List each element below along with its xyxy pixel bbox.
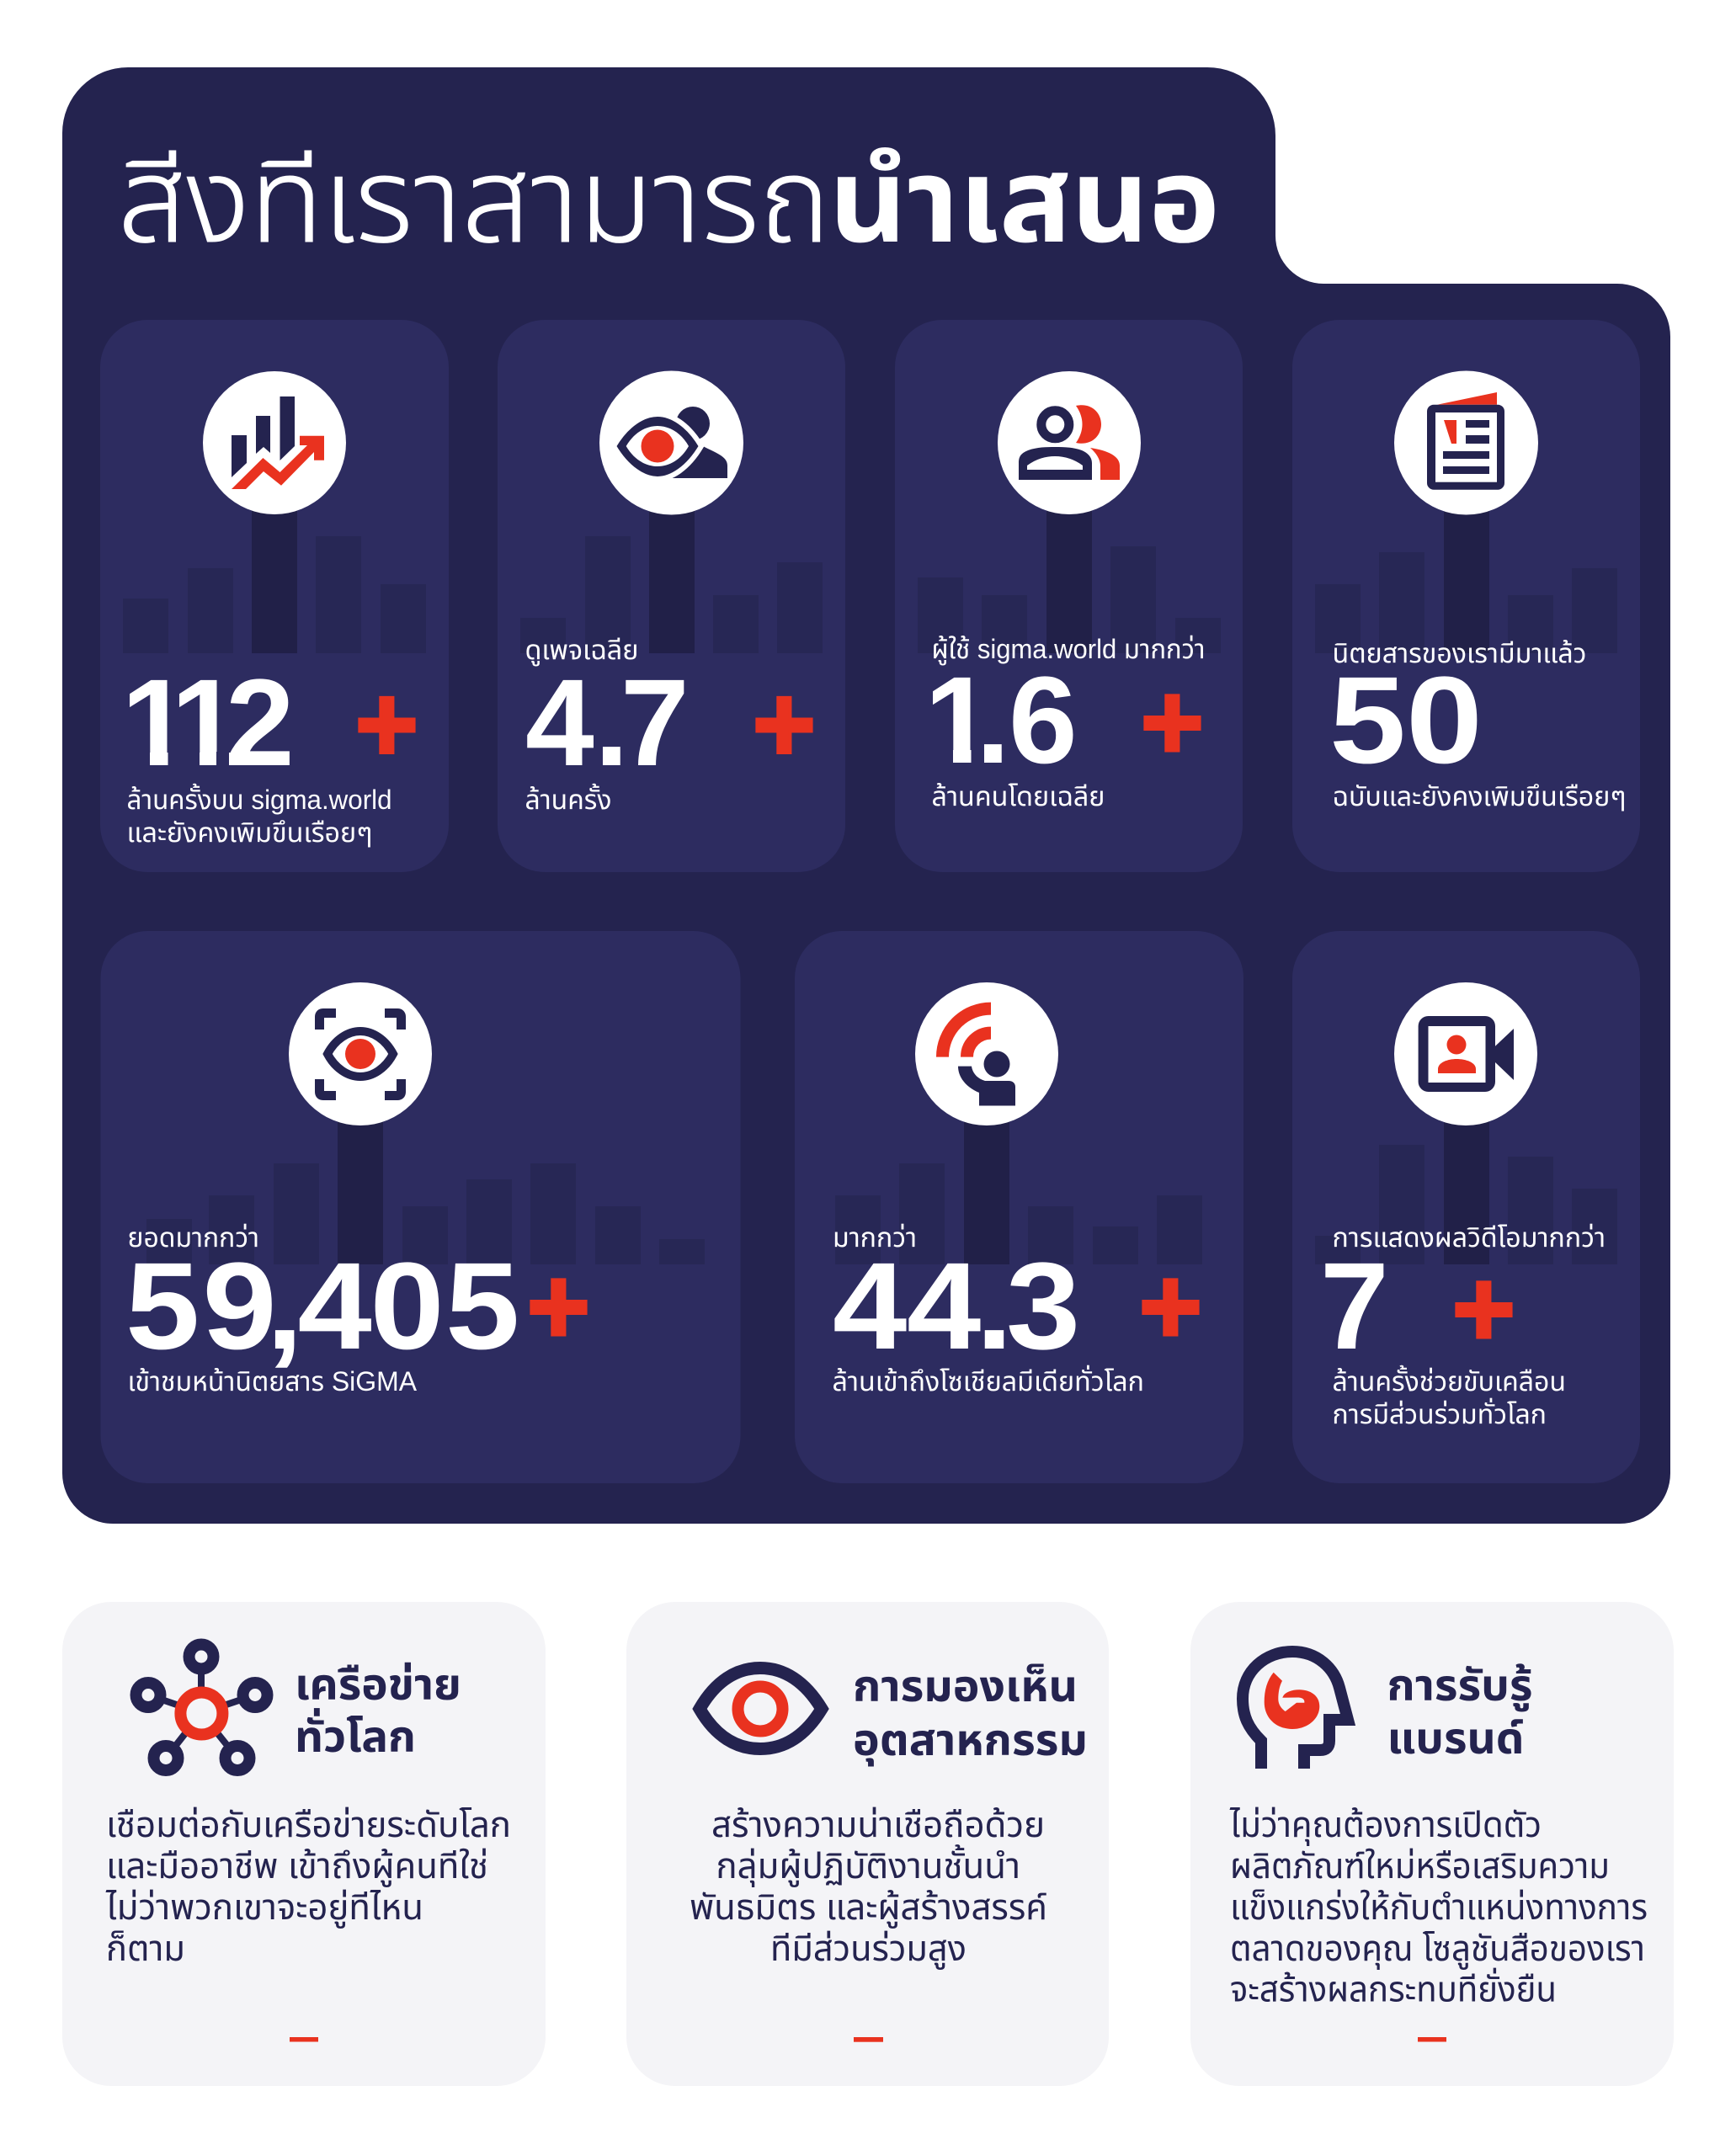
- label: ดูเพจเฉลีย: [525, 635, 638, 667]
- number: 1.6: [924, 652, 1078, 790]
- bar chart: [123, 505, 426, 653]
- icon: network: [136, 1645, 268, 1770]
- caption: [126, 783, 392, 848]
- caption: และยังคงเพิมขึนเรือยๆ: [126, 817, 372, 848]
- card: 112 million: [100, 320, 449, 872]
- body text: ไม่ว่าคุณต้องการเปิดตัว: [1229, 1805, 1542, 1846]
- heading: ทั่วโลก: [295, 1708, 416, 1762]
- number: 44.3: [833, 1237, 1080, 1375]
- card: 50 issues: [1292, 320, 1640, 872]
- card background: [100, 320, 449, 872]
- red dash: [1418, 2037, 1446, 2042]
- heading: [1387, 1662, 1532, 1764]
- number: 59,405: [125, 1237, 519, 1375]
- panel: dark stats background: [62, 67, 1670, 1524]
- bar chart: [1315, 505, 1617, 653]
- plus sign: +: [355, 664, 418, 785]
- title: [118, 135, 1220, 267]
- caption: ล้านเข้าถึงโซเชียลมีเดียทั่วโลก: [832, 1365, 1144, 1397]
- panel: global network: [62, 1602, 546, 2086]
- icon: magazine: [1394, 370, 1538, 515]
- bar chart: [835, 1111, 1202, 1264]
- card background: [626, 1602, 1109, 2086]
- body text: ผลิตภัณฑ์ใหม่หรือเสริมความ: [1230, 1846, 1610, 1886]
- plus sign: +: [1139, 1246, 1202, 1367]
- body text: จะสร้างผลกระทบทียั่งยืน: [1230, 1967, 1557, 2009]
- bar chart: [146, 1111, 705, 1264]
- caption: เข้าชมหน้านิตยสาร SiGMA: [128, 1366, 418, 1397]
- number: 7: [1320, 1237, 1389, 1375]
- icon: growth chart: [203, 371, 346, 514]
- card background: [498, 320, 845, 872]
- caption: ล้านครั้งช่วยขับเคลือน: [1332, 1365, 1566, 1397]
- panel: industry visibility: [626, 1602, 1109, 2086]
- card: 44.3 million reach: [795, 931, 1243, 1483]
- label: ยอดมากกว่า: [128, 1222, 259, 1253]
- red dash: [290, 2037, 318, 2042]
- label: นิตยสารของเรามีมาแล้ว: [1332, 638, 1586, 668]
- plus sign: +: [527, 1246, 590, 1367]
- label: มากกว่า: [833, 1222, 917, 1253]
- heading: [295, 1661, 461, 1762]
- card: 59,405 views: [101, 931, 741, 1483]
- caption: ล้านครั้งบน sigma.world: [126, 783, 392, 815]
- card background: [1292, 320, 1640, 872]
- body text: [105, 1805, 511, 1968]
- heading: แบรนด์: [1387, 1715, 1524, 1764]
- number: 50: [1329, 652, 1483, 790]
- red dash: [854, 2037, 883, 2042]
- body text: พันธมิตร และผู้สร้างสรรค์: [690, 1887, 1047, 1929]
- label: การแสดงผลวิดีโอมากกว่า: [1332, 1222, 1606, 1253]
- card background: [795, 931, 1243, 1483]
- card: 7 million video: [1292, 931, 1640, 1483]
- title: สีงทีเราสามารถ: [118, 135, 830, 267]
- caption: [1332, 1365, 1566, 1429]
- caption: ล้านคนโดยเฉลีย: [931, 781, 1105, 811]
- body text: ไม่ว่าพวกเขาจะอยู่ทีไหน: [105, 1887, 423, 1929]
- bar chart: [1315, 1111, 1617, 1264]
- number: 4.7: [525, 654, 690, 792]
- body text: กลุ่มผู้ปฏิบัติงานชั้นนำ: [716, 1844, 1020, 1887]
- number: 112: [121, 654, 295, 792]
- icon: eye: [700, 1668, 822, 1749]
- plus sign: +: [753, 664, 816, 785]
- icon: social broadcast: [915, 982, 1058, 1125]
- icon: video camera: [1394, 982, 1537, 1125]
- body text: แข็งแกร่งให้กับตำแหน่งทางการ: [1230, 1887, 1648, 1927]
- heading: การรับรู้: [1387, 1662, 1532, 1712]
- body text: [690, 1805, 1047, 1970]
- heading: [853, 1663, 1088, 1766]
- body text: เชือมต่อกับเครือข่ายระดับโลก: [106, 1805, 511, 1844]
- icon: head with spiral: [1243, 1652, 1348, 1769]
- heading: อุตสาหกรรม: [853, 1716, 1088, 1766]
- title: นำเสนอ: [829, 135, 1220, 267]
- card background: [62, 1602, 546, 2086]
- caption: การมีส่วนร่วมทั่วโลก: [1332, 1397, 1547, 1429]
- heading: การมองเห็น: [853, 1663, 1078, 1711]
- heading: เครือข่าย: [295, 1661, 461, 1710]
- icon: eye with audience: [599, 370, 743, 515]
- card background: [1190, 1602, 1674, 2086]
- body text: ตลาดของคุณ โซลูชันสือของเรา: [1230, 1929, 1645, 1970]
- card background: [1292, 931, 1640, 1483]
- body text: และมืออาชีพ เข้าถึงผู้คนทีใช่: [106, 1846, 488, 1887]
- plus sign: +: [1141, 662, 1204, 783]
- body text: [1229, 1805, 1648, 2009]
- bar chart: [520, 505, 823, 653]
- icon: scan eye: [289, 982, 432, 1125]
- panel: brand awareness: [1190, 1602, 1674, 2086]
- caption: ฉบับและยังคงเพิมขึนเรือยๆ: [1332, 781, 1627, 811]
- card background: [101, 931, 741, 1483]
- bar chart: [918, 505, 1221, 653]
- card: 4.7 million: [498, 320, 845, 872]
- card background: [895, 320, 1243, 872]
- label: ผู้ใช้ sigma.world มากกว่า: [931, 634, 1206, 666]
- card: 1.6 million: [895, 320, 1243, 872]
- plus sign: +: [1452, 1249, 1515, 1369]
- caption: ล้านครั้ง: [525, 783, 611, 815]
- body text: ทีมีส่วนร่วมสูง: [770, 1929, 967, 1970]
- body text: ก็ตาม: [106, 1929, 185, 1968]
- body text: สร้างความน่าเชือถือด้วย: [711, 1805, 1045, 1844]
- icon: users: [998, 371, 1141, 514]
